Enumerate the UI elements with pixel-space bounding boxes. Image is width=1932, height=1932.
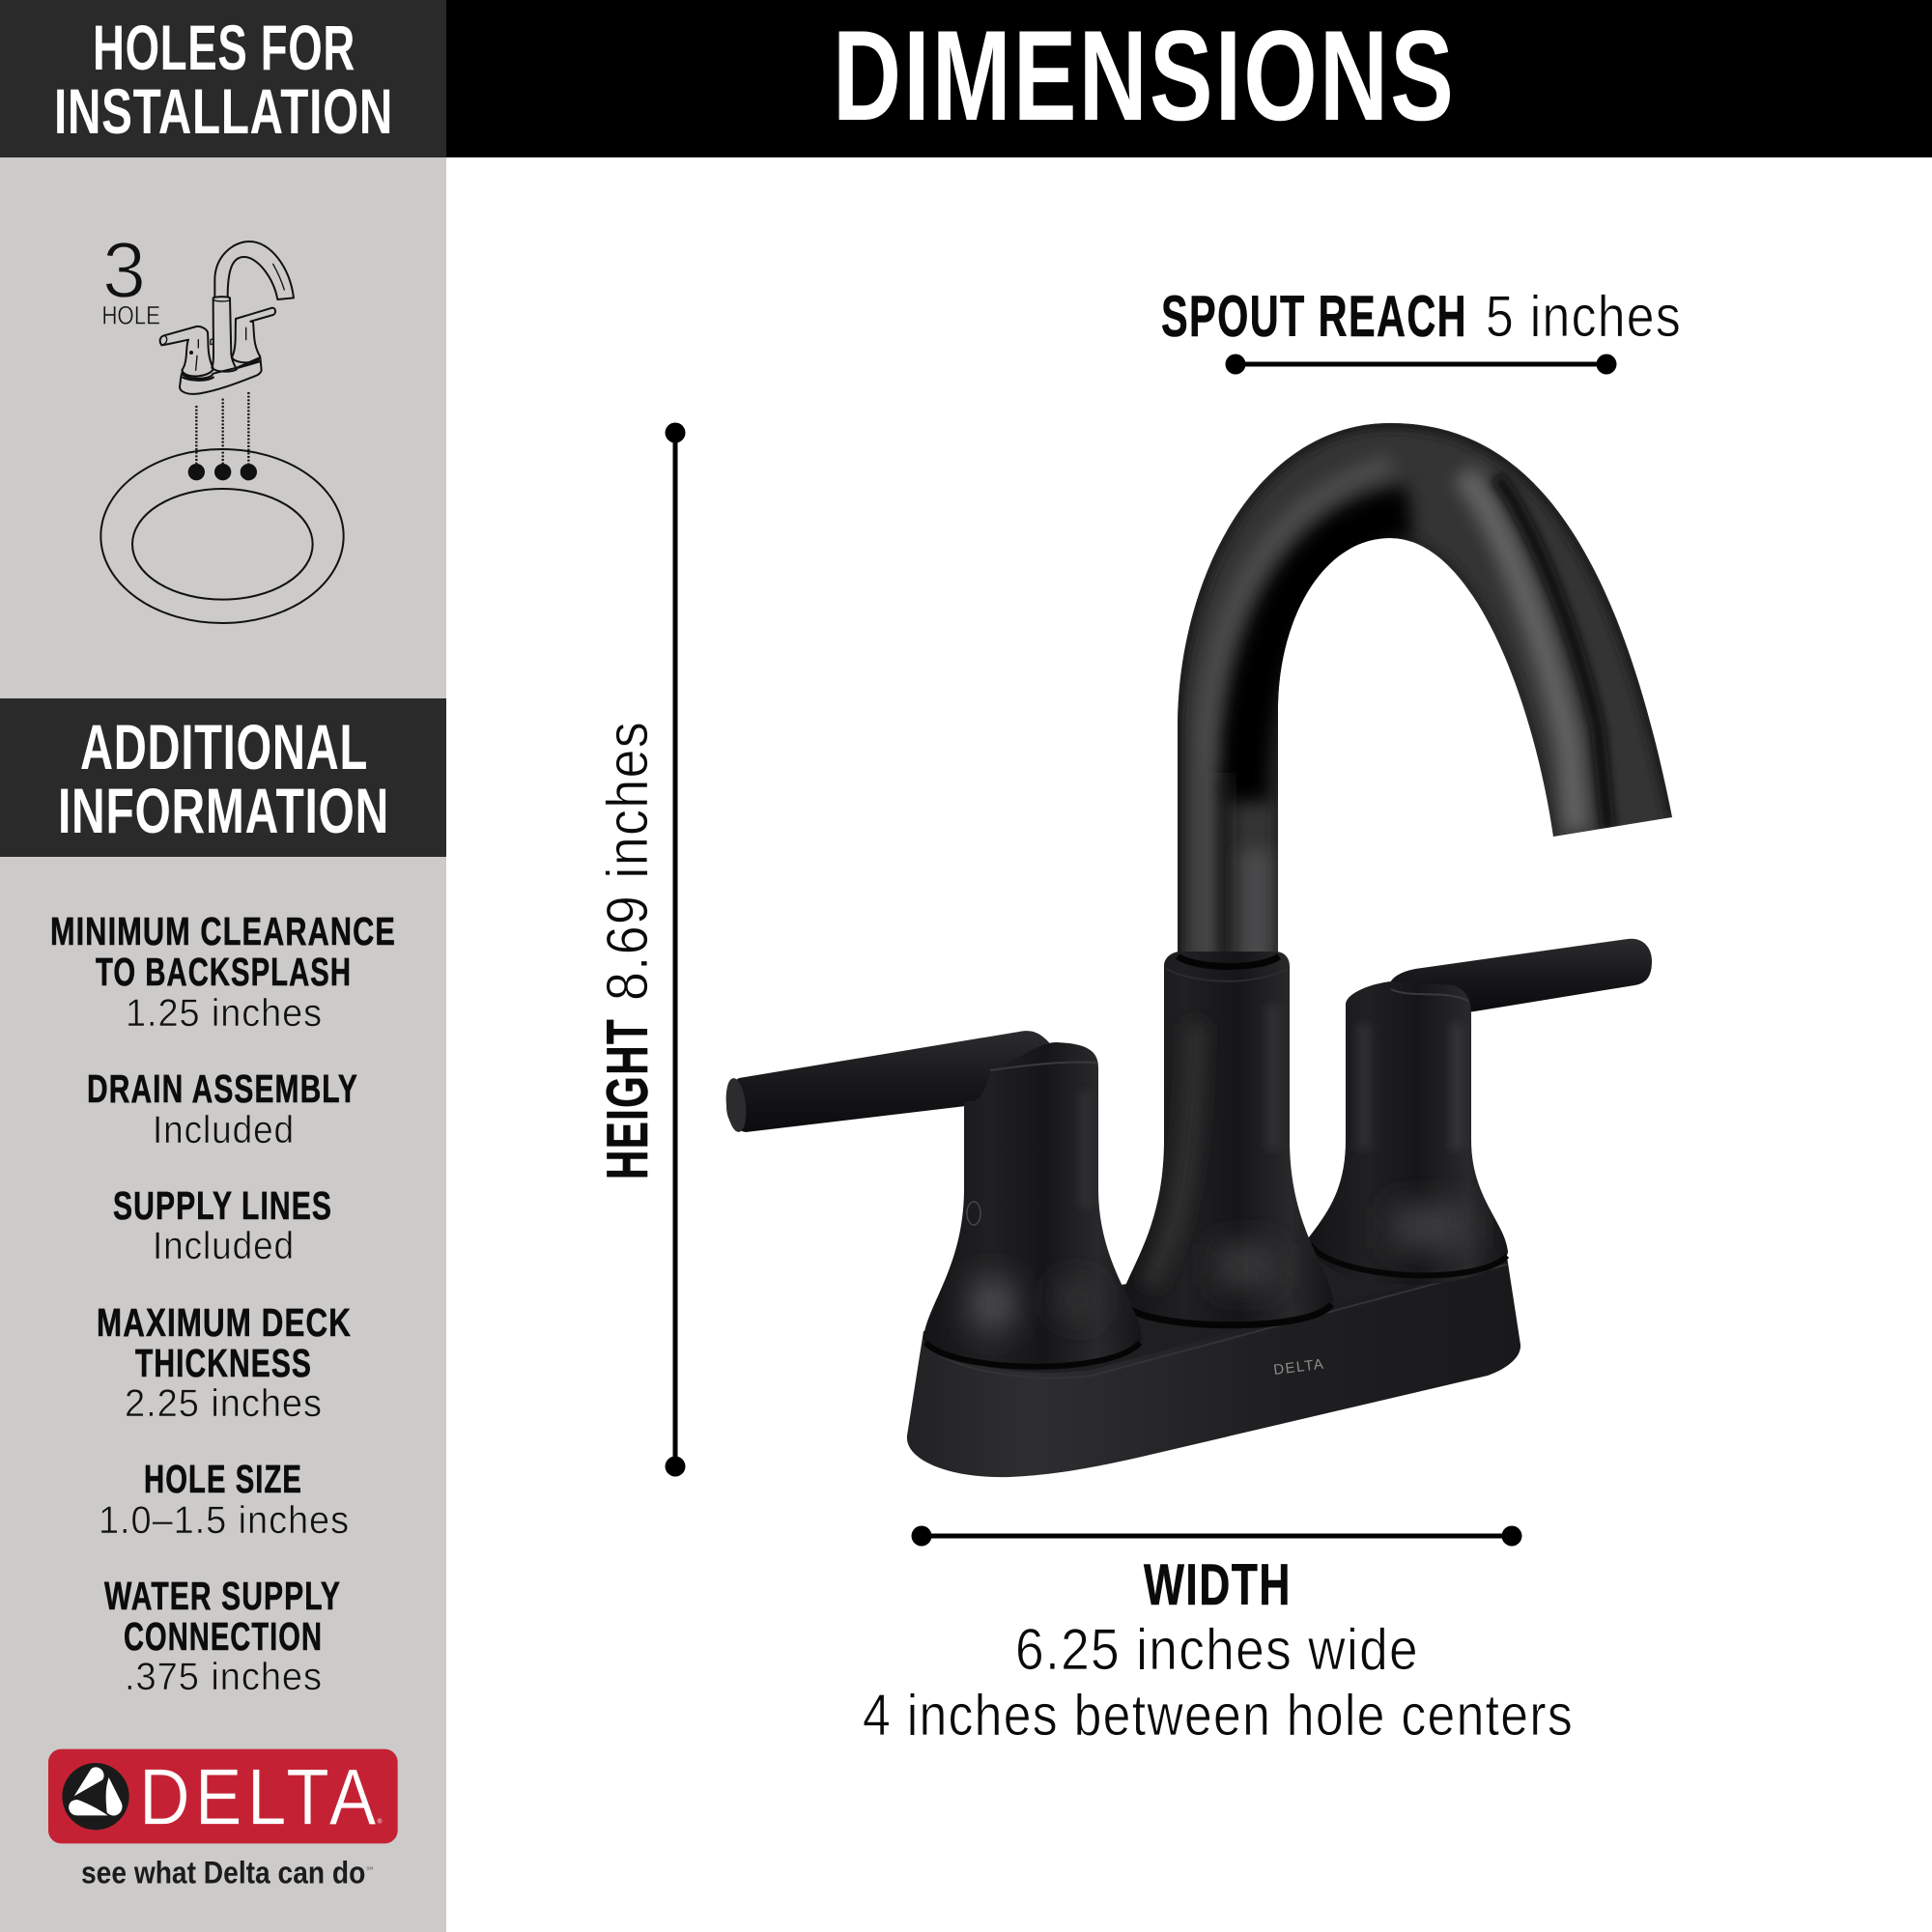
text block: maximum deck thickness [97, 1300, 352, 1425]
text block: maximum deck thickness: THICKNESS [135, 1341, 312, 1385]
dimensions title bar [446, 0, 1932, 157]
dimension: height [595, 423, 686, 1476]
text block: drain assembly [87, 1066, 358, 1151]
right handle [1308, 939, 1652, 1285]
text block: maximum deck thickness: MAXIMUM DECK [97, 1300, 352, 1345]
faucet product image [724, 423, 1672, 1477]
heading: additional information: INFORMATION [58, 775, 389, 846]
base plate: DELTA [1272, 1356, 1325, 1378]
text block: water supply connection: CONNECTION [124, 1614, 323, 1659]
logo: Delta: SM [366, 1865, 373, 1870]
dimension: spout reach: SPOUT REACH [1161, 284, 1467, 349]
text block: supply lines [113, 1183, 332, 1267]
text block: drain assembly: DRAIN ASSEMBLY [87, 1066, 358, 1111]
dimension: width: 4 inches between hole centers [863, 1683, 1574, 1747]
text block: hole size [99, 1457, 350, 1542]
text block: hole size: HOLE SIZE [144, 1457, 302, 1501]
logo: Delta: see what Delta can do [81, 1855, 365, 1889]
logo: Delta: DELTA [139, 1752, 382, 1841]
heading: holes for installation: HOLES FOR [93, 12, 355, 83]
text block: minimum clearance [50, 909, 396, 1035]
logo: Delta [48, 1749, 398, 1889]
text block: minimum clearance: MINIMUM CLEARANCE [50, 909, 396, 953]
center column [1121, 952, 1333, 1328]
heading: holes for installation: INSTALLATION [54, 75, 393, 147]
icon: handle button [967, 1202, 980, 1225]
icon: three hole faucet and sink diagram: HOLE [101, 301, 160, 330]
dimension: spout reach: 5 inches [1486, 284, 1682, 349]
text block: minimum clearance: TO BACKSPLASH [96, 950, 352, 994]
text block: water supply connection [104, 1574, 341, 1698]
heading: additional information: ADDITIONAL [80, 711, 368, 782]
base plate [907, 1236, 1520, 1477]
spout [1178, 423, 1672, 966]
icon: three hole faucet and sink diagram: 3 [102, 226, 146, 314]
sidebar panel [0, 0, 446, 1932]
heading: additional information [0, 698, 446, 857]
text block: water supply connection: .375 inches [125, 1656, 323, 1698]
dimension: width: WIDTH [1144, 1552, 1292, 1617]
dimension: height: HEIGHT [595, 1018, 660, 1179]
text block: maximum deck thickness: 2.25 inches [125, 1382, 323, 1425]
dimension: width: 6.25 inches wide [1015, 1617, 1419, 1682]
title: DIMENSIONS: DIMENSIONS [833, 5, 1456, 148]
dimension: height: 8.69 inches [595, 721, 660, 1001]
dimension: width [863, 1526, 1574, 1747]
text block: hole size: 1.0–1.5 inches [99, 1499, 350, 1542]
dimension: spout reach [1161, 284, 1682, 375]
text block: minimum clearance: 1.25 inches [126, 992, 323, 1035]
heading: holes for installation [0, 0, 446, 157]
icon: three hole faucet and sink diagram [100, 226, 344, 623]
text block: drain assembly: Included [153, 1109, 295, 1151]
text block: supply lines: Included [153, 1225, 295, 1267]
left handle [724, 1031, 1142, 1369]
logo: Delta: ® [378, 1818, 383, 1826]
text block: supply lines: SUPPLY LINES [113, 1183, 332, 1228]
text block: water supply connection: WATER SUPPLY [104, 1574, 341, 1618]
